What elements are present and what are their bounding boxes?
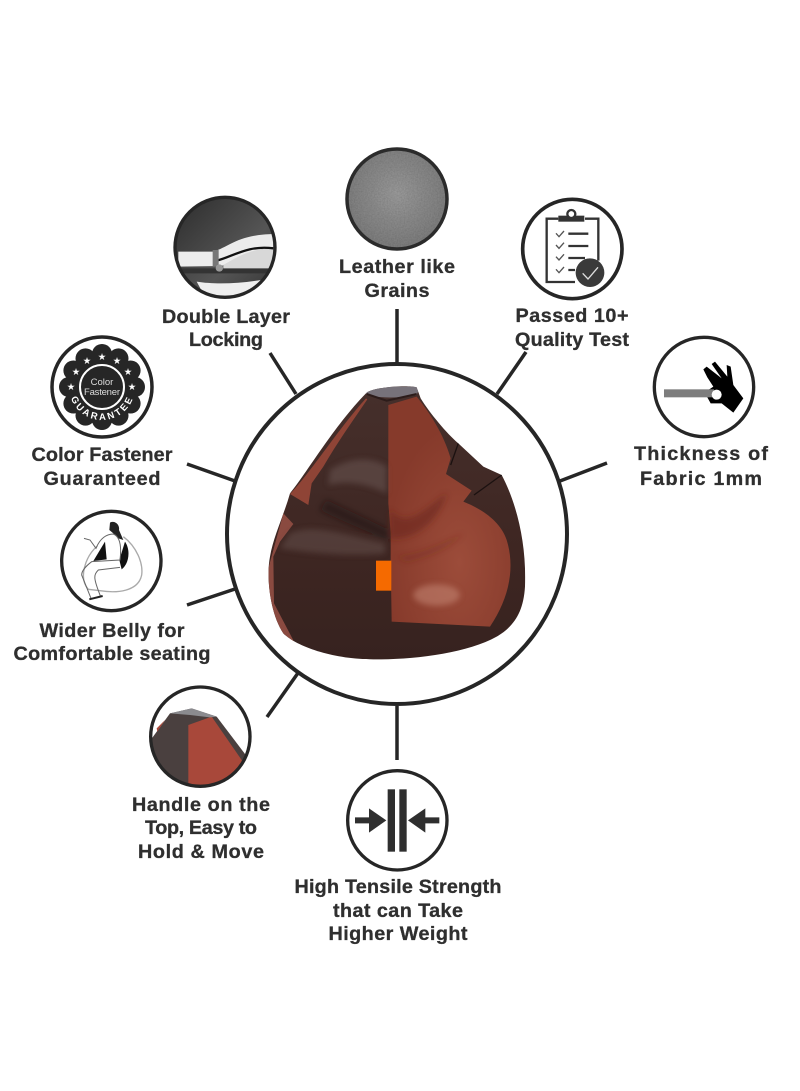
connector lines (187, 309, 607, 760)
feature: handle on the top: Handle on the (132, 794, 270, 816)
icon: clipboard checklist (523, 199, 622, 299)
feature: thickness of fabric: Thickness of (634, 443, 768, 465)
icon: guarantee badge: GUARANTEE (72, 396, 132, 420)
scalloped seal (59, 344, 145, 430)
icon: compression arrows (348, 771, 447, 870)
icon: bag top photo (150, 687, 251, 790)
icon: guarantee badge (50, 335, 154, 439)
icon: guarantee badge: ★ (113, 356, 121, 367)
icon: zipper photo (173, 197, 277, 300)
feature: wider belly: Wider Belly for (40, 620, 185, 642)
feature: passed quality test (515, 199, 629, 351)
feature: wider belly: Comfortable seating (14, 643, 210, 665)
icon: guarantee badge: Color (91, 377, 113, 388)
feature: wider belly (14, 511, 210, 665)
feature: thickness of fabric (634, 337, 768, 490)
icon: guarantee badge: Fastener (84, 387, 120, 398)
feature: color fastener guaranteed: Guaranteed (44, 468, 160, 490)
icon: guarantee badge: ★ (128, 382, 136, 393)
bean bag product image (260, 380, 533, 667)
feature: thickness of fabric: Fabric 1mm (640, 468, 762, 490)
feature: color fastener guaranteed: Color Fastener (32, 444, 173, 466)
feature: passed quality test: Quality Test (515, 329, 629, 351)
feature: color fastener guaranteed (32, 335, 173, 490)
central product circle (227, 364, 567, 704)
icon: guarantee badge: ★ (124, 367, 132, 378)
feature: passed quality test: Passed 10+ (516, 305, 628, 327)
feature: high tensile strength: High Tensile Strength (294, 876, 502, 898)
feature: double layer locking: Locking (189, 329, 263, 351)
icon: guarantee badge: ★ (98, 352, 106, 363)
feature: high tensile strength: that can Take (333, 900, 463, 922)
feature: leather like grains (339, 149, 455, 302)
icon: guarantee badge: ★ (72, 367, 80, 378)
icon: guarantee badge: ★ (67, 382, 75, 393)
feature: leather like grains: Leather like (339, 256, 455, 278)
feature: handle on the top (132, 687, 270, 863)
icon: hand pinching fabric (654, 337, 754, 437)
icon: guarantee badge: ★ (83, 356, 91, 367)
feature: double layer locking (162, 197, 290, 351)
feature: high tensile strength (294, 771, 502, 945)
icon: woman seated on bean bag (62, 511, 161, 611)
feature: handle on the top: Top, Easy to (145, 817, 257, 839)
feature: handle on the top: Hold & Move (138, 841, 264, 863)
orange tag (376, 561, 391, 591)
icon: grey leather swatch (347, 149, 447, 249)
feature: double layer locking: Double Layer (162, 306, 290, 328)
feature: high tensile strength: Higher Weight (328, 923, 468, 945)
feature: leather like grains: Grains (364, 280, 430, 302)
